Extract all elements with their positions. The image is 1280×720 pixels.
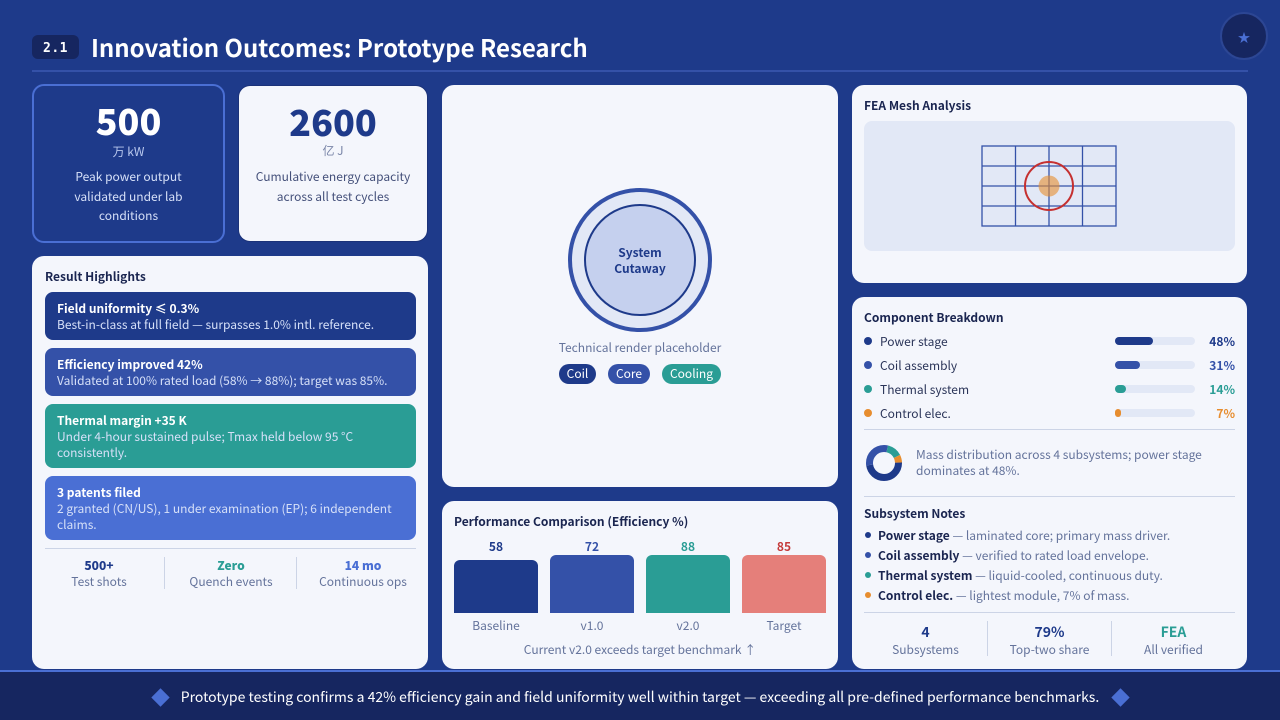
label: control electronics: Control elec. [880,405,951,422]
metric: FEA verified: All verified [1144,641,1203,658]
header rule [32,70,1248,72]
diagram: system cutaway [568,188,712,332]
label: power stage: Power stage [880,333,948,350]
metric: continuous ops: Continuous ops [319,573,407,590]
bar: target [742,555,826,613]
metric: quench events [189,557,273,590]
label: v2.0: v2.0 [677,617,699,634]
bar: coil assembly [1115,361,1195,369]
metric: FEA verified [1144,622,1203,658]
label: target: Target [766,617,802,634]
metric: top-two share: 79% [1034,622,1064,642]
value: 31%: 31% [1209,357,1235,374]
legend pill: cooling [662,364,721,384]
panel: result highlights [32,256,428,669]
panel: performance comparison [442,501,838,669]
panel: FEA mesh analysis [852,85,1247,283]
highlight: thermal margin [45,404,416,468]
icon: star emblem [1220,12,1268,60]
legend pill: core: Core [616,365,642,382]
diagram: system cutaway: Cutaway [614,260,666,277]
value: 7%: 7% [1216,405,1235,422]
metric: continuous ops: 14 mo [345,557,381,574]
metric: top-two share [1010,622,1089,658]
bar: v2.0 [646,555,730,613]
icon: star emblem: ★ [1238,27,1250,46]
stat description: across all test cycles [277,188,389,204]
panel: component breakdown [852,297,1247,669]
highlight: patents: 3 patents filed [57,484,141,501]
metric: test shots: Test shots [71,573,127,590]
legend pill: coil: Coil [567,365,588,382]
legend dot: power stage [864,337,872,345]
header badge: 2.1 [43,41,68,56]
label: coil assembly: Coil assembly [880,357,957,374]
note dot [865,592,871,598]
title: Innovation Outcomes: Prototype Research [91,29,588,64]
metric: quench events: Zero [217,557,245,574]
highlight: patents [45,476,416,540]
highlight: efficiency: Efficiency improved 42% [57,356,203,373]
label: v1.0: v1.0 [581,617,603,634]
header badge [32,35,79,59]
metric: subsystems: Subsystems [892,641,959,658]
highlight: thermal margin: Under 4-hour sustained pulse; Tmax held below 95 °C consistently. [57,428,353,461]
note dot [865,532,871,538]
footer banner [0,670,1280,720]
note: power stage: Power stage — laminated core; primary mass driver. [878,527,1170,544]
bar: baseline [454,560,538,613]
donut chart: mass distribution [866,445,902,481]
metric: test shots: 500+ [84,557,114,574]
metric: FEA verified: FEA [1161,622,1186,642]
metric: continuous ops [319,557,407,590]
highlight: efficiency [45,348,416,396]
donut caption: Mass distribution across 4 subsystems; power stage dominates at 48%. [916,446,1202,479]
stat description: validated under lab [74,188,183,204]
legend pill: cooling: Cooling [670,365,713,382]
highlight: field uniformity [45,292,416,340]
bar: v1.0 [550,555,634,613]
stat unit: 亿 J [322,142,344,159]
heading: component breakdown: Component Breakdown [864,309,1004,326]
stat description [256,168,410,204]
panel: system cutaway [442,85,838,487]
metric: subsystems [892,622,959,658]
bar: control electronics [1115,409,1195,417]
chart caption: Current v2.0 exceeds target benchmark ↑ [524,641,756,658]
stat value: 500 [96,94,161,146]
note: coil assembly: Coil assembly — verified to rated load envelope. [878,547,1149,564]
takeaway text: Prototype testing confirms a 42% efficiency gain and field uniformity well within target — exceeding all pre-defined performance benchmarks. [181,687,1099,707]
stat card: energy capacity [239,86,427,241]
value: 72: 72 [585,538,599,555]
heading: result highlights: Result Highlights [45,268,146,285]
icon: left diamond [151,688,169,706]
icon: right diamond [1111,688,1129,706]
heading: performance comparison: Performance Comparison (Efficiency %) [454,513,688,530]
stat description: conditions [99,207,158,224]
label: baseline: Baseline [472,617,520,634]
bar: thermal system [1115,385,1195,393]
value: 48%: 48% [1209,333,1235,350]
metric: quench events: Quench events [189,573,273,590]
diagram: system cutaway: System [618,244,662,261]
metric: top-two share: Top-two share [1010,641,1089,658]
highlight: field uniformity: Best-in-class at full field — surpasses 1.0% intl. reference. [57,316,374,333]
note: control electronics: Control elec. — lightest module, 7% of mass. [878,587,1130,604]
note dot [865,572,871,578]
legend dot: coil assembly [864,361,872,369]
panel background [32,256,428,669]
note: thermal system: Thermal system — liquid-cooled, continuous duty. [878,567,1163,584]
highlight: patents: 2 granted (CN/US), 1 under examination (EP); 6 independent claims. [57,500,392,533]
heading: FEA mesh analysis: FEA Mesh Analysis [864,97,971,114]
value: 85: 85 [777,538,791,555]
stat description: Peak power output [75,168,182,185]
heading: subsystem notes: Subsystem Notes [864,505,965,522]
stat description [74,168,183,224]
stat card: peak power [32,84,225,243]
stat value: 2600 [289,95,377,147]
note dot [865,552,871,558]
metric: test shots [71,557,127,590]
legend dot: thermal system [864,385,872,393]
highlight: efficiency: Validated at 100% rated load (58% → 88%); target was 85%. [57,372,387,389]
legend pill: core [608,364,650,384]
value: 88: 88 [681,538,695,555]
label: thermal system: Thermal system [880,381,969,398]
value: 58: 58 [489,538,503,555]
legend pill: coil [559,364,596,384]
legend dot: control electronics [864,409,872,417]
bar: power stage [1115,337,1195,345]
highlight: thermal margin: Thermal margin +35 K [57,412,187,429]
value: 14%: 14% [1209,381,1235,398]
stat unit: 万 kW [113,143,144,160]
notes list [865,527,1170,604]
highlight: field uniformity: Field uniformity ≤ 0.3% [57,300,199,317]
stat description: Cumulative energy capacity [256,168,410,185]
metric: subsystems: 4 [921,622,930,642]
diagram: FEA mesh [864,121,1235,251]
caption: render placeholder: Technical render placeholder [559,339,721,356]
